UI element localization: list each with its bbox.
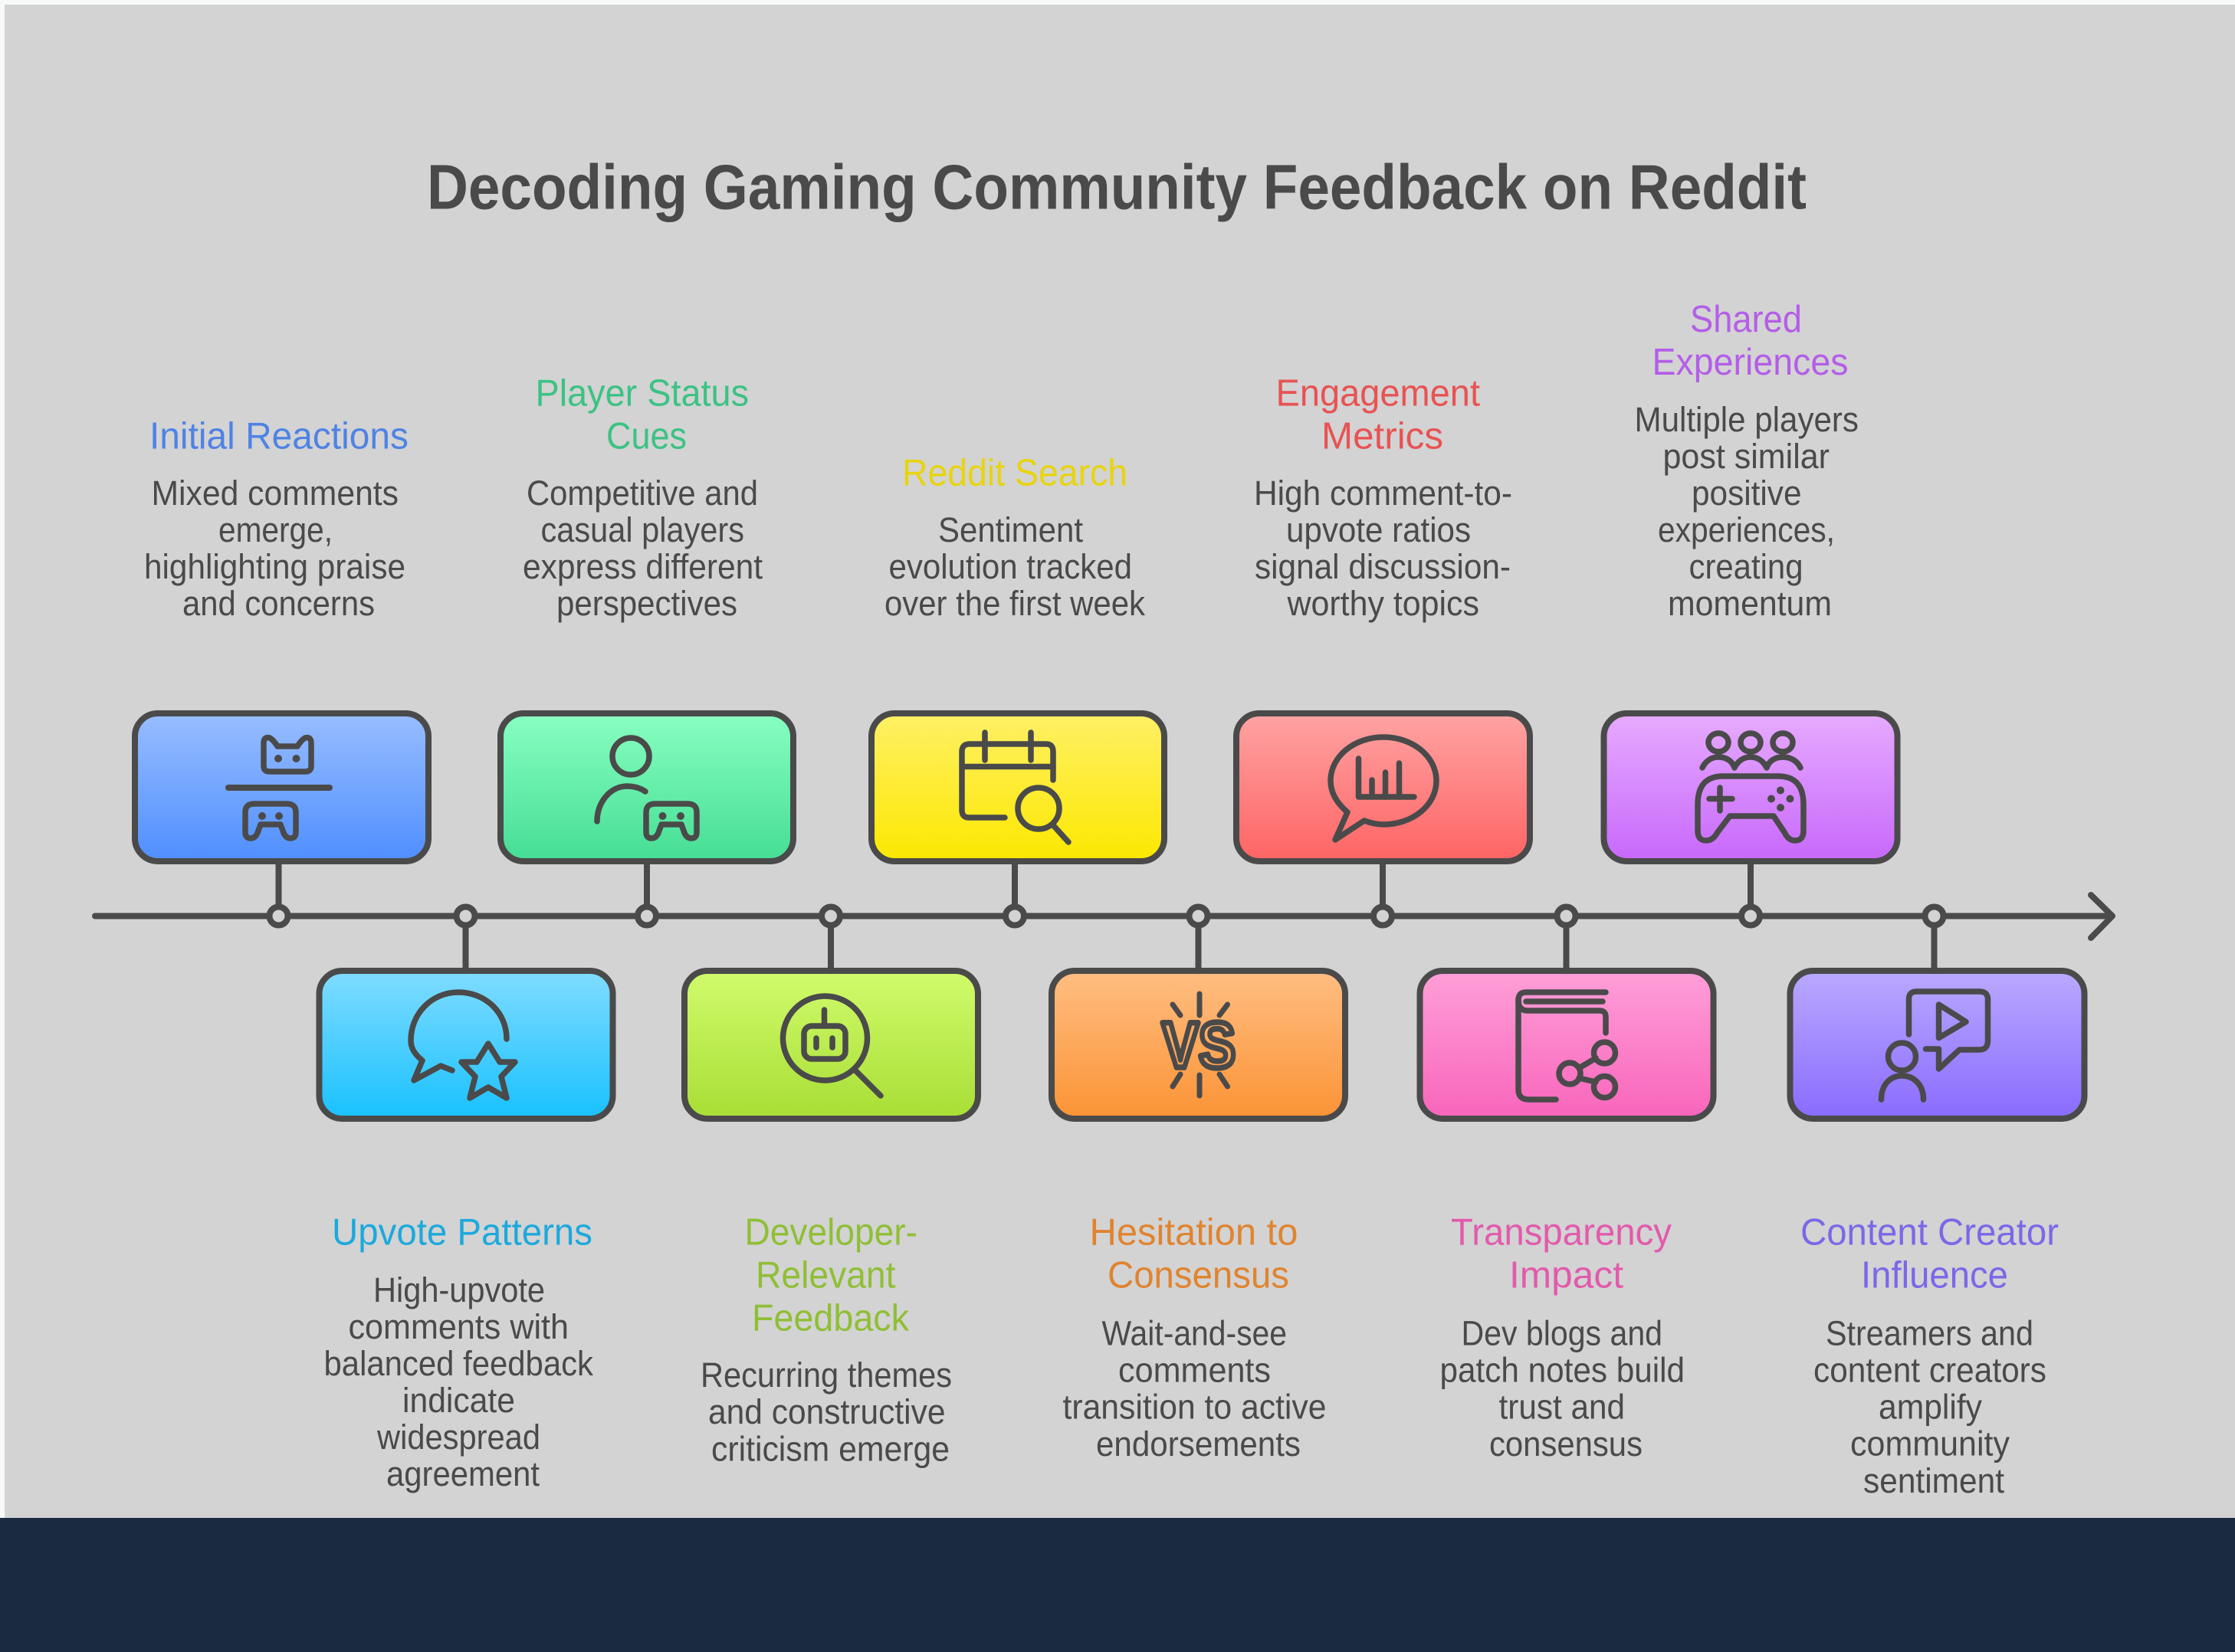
text block: hesitation to consensus: Hesitation to bbox=[1090, 1212, 1298, 1254]
text block: transparency impact: consensus bbox=[1489, 1424, 1643, 1464]
icon: book with share symbol bbox=[1518, 992, 1616, 1100]
panel: content creator card bbox=[1790, 971, 2085, 1119]
panel: initial reactions card bbox=[135, 713, 428, 861]
text block: initial reactions bbox=[144, 415, 409, 623]
text block: reddit search: evolution tracked bbox=[889, 547, 1132, 586]
text block: player status cues: perspectives bbox=[556, 584, 737, 623]
footer band bbox=[0, 1518, 2235, 1652]
text block: content creator influence: sentiment bbox=[1863, 1461, 2004, 1500]
text block: engagement metrics: Metrics bbox=[1321, 415, 1443, 457]
text block: shared experiences: Multiple players bbox=[1634, 400, 1859, 439]
text block: reddit search: Sentiment bbox=[938, 510, 1083, 549]
text block: engagement metrics bbox=[1254, 372, 1512, 623]
text block: hesitation to consensus: comments bbox=[1118, 1350, 1271, 1390]
text block: initial reactions: Initial Reactions bbox=[149, 415, 409, 457]
icon: calendar with magnifier bbox=[962, 733, 1068, 842]
text block: initial reactions: highlighting praise bbox=[144, 547, 405, 586]
text block: shared experiences: Experiences bbox=[1652, 342, 1849, 383]
panel: transparency card bbox=[1419, 971, 1714, 1119]
text block: content creator influence: community bbox=[1850, 1424, 2010, 1464]
timeline axis with arrow bbox=[95, 895, 2112, 938]
icon: creator with video bubble bbox=[1881, 992, 1988, 1100]
text block: upvote patterns: Upvote Patterns bbox=[332, 1212, 592, 1254]
panel: hesitation card bbox=[1052, 971, 1345, 1119]
text block: hesitation to consensus: endorsements bbox=[1096, 1424, 1301, 1464]
text block: developer-relevant feedback: Recurring themes bbox=[701, 1355, 952, 1395]
text block: player status cues: Player Status bbox=[535, 372, 749, 414]
icon: cat over controller bbox=[228, 738, 330, 838]
text block: content creator influence: amplify bbox=[1879, 1387, 1982, 1427]
text block: upvote patterns: indicate bbox=[402, 1381, 515, 1420]
text block: content creator influence: Streamers and bbox=[1826, 1313, 2033, 1353]
text block: initial reactions: emerge, bbox=[218, 510, 333, 549]
text block: initial reactions: Mixed comments bbox=[152, 474, 399, 513]
panel: upvote patterns card bbox=[319, 971, 613, 1119]
text block: hesitation to consensus: Wait-and-see bbox=[1102, 1313, 1287, 1353]
text block: upvote patterns: High-upvote bbox=[373, 1270, 545, 1309]
text block: transparency impact bbox=[1439, 1212, 1685, 1464]
text block: engagement metrics: upvote ratios bbox=[1286, 510, 1471, 549]
connectors and nodes bbox=[270, 864, 1944, 969]
text block: developer-relevant feedback: Feedback bbox=[752, 1298, 909, 1339]
icon: speech bubble with bar chart bbox=[1331, 737, 1436, 840]
icon: robot in magnifier bbox=[783, 996, 881, 1096]
text block: transparency impact: Transparency bbox=[1451, 1212, 1672, 1254]
text block: content creator influence: content creators bbox=[1813, 1350, 2046, 1390]
icon: player with controller bbox=[597, 738, 697, 838]
text block: engagement metrics: High comment-to- bbox=[1254, 474, 1512, 513]
text block: shared experiences: creating bbox=[1689, 547, 1803, 586]
text block: transparency impact: Impact bbox=[1509, 1255, 1623, 1296]
text block: shared experiences: experiences, bbox=[1658, 510, 1835, 549]
text block: player status cues: Cues bbox=[606, 415, 687, 457]
panel: developer feedback card bbox=[684, 971, 978, 1119]
text block: shared experiences: positive bbox=[1692, 474, 1801, 513]
text block: developer-relevant feedback: and constructive bbox=[708, 1392, 946, 1431]
title: Decoding Gaming Community Feedback on Reddit bbox=[427, 152, 1807, 222]
text block: reddit search: Reddit Search bbox=[902, 452, 1127, 493]
text block: engagement metrics: worthy topics bbox=[1287, 584, 1479, 623]
text block: transparency impact: patch notes build bbox=[1439, 1350, 1685, 1390]
text block: upvote patterns: balanced feedback bbox=[323, 1344, 593, 1383]
text block: developer-relevant feedback: Developer- bbox=[745, 1212, 917, 1254]
text block: player status cues bbox=[523, 372, 763, 623]
text block: hesitation to consensus: transition to active bbox=[1062, 1387, 1326, 1427]
text block: shared experiences: post similar bbox=[1663, 437, 1830, 476]
text block: content creator influence bbox=[1800, 1212, 2059, 1500]
icon: VS with rays: VS bbox=[1162, 1009, 1236, 1081]
text block: content creator influence: Content Creator bbox=[1800, 1212, 2059, 1254]
text block: hesitation to consensus: Consensus bbox=[1108, 1255, 1289, 1296]
text block: developer-relevant feedback bbox=[701, 1212, 952, 1468]
text block: initial reactions: and concerns bbox=[182, 584, 375, 623]
text block: shared experiences: momentum bbox=[1668, 584, 1832, 623]
text block: shared experiences bbox=[1634, 299, 1859, 623]
icon: VS with rays bbox=[1162, 994, 1236, 1096]
text block: transparency impact: trust and bbox=[1499, 1387, 1625, 1427]
panel: player status card bbox=[500, 713, 793, 861]
text block: upvote patterns: comments with bbox=[348, 1307, 569, 1346]
text block: reddit search: over the first week bbox=[884, 584, 1145, 623]
panel: engagement metrics card bbox=[1236, 713, 1530, 861]
icon: chat bubble with star bbox=[411, 992, 515, 1098]
text block: developer-relevant feedback: Relevant bbox=[756, 1255, 896, 1296]
text block: shared experiences: Shared bbox=[1690, 299, 1802, 340]
text block: player status cues: casual players bbox=[541, 510, 744, 549]
text block: player status cues: Competitive and bbox=[527, 474, 758, 513]
panel: reddit search card bbox=[871, 713, 1164, 861]
text block: upvote patterns bbox=[323, 1212, 593, 1493]
text block: reddit search bbox=[884, 452, 1145, 623]
text block: upvote patterns: agreement bbox=[386, 1454, 540, 1493]
text block: developer-relevant feedback: criticism emerge bbox=[711, 1430, 950, 1468]
text block: engagement metrics: signal discussion- bbox=[1255, 547, 1511, 586]
icon: players and game controller bbox=[1698, 733, 1803, 841]
panel: shared experiences card bbox=[1603, 713, 1898, 861]
text block: engagement metrics: Engagement bbox=[1275, 372, 1480, 414]
text block: player status cues: express different bbox=[523, 547, 763, 586]
text block: transparency impact: Dev blogs and bbox=[1461, 1313, 1662, 1353]
text block: content creator influence: Influence bbox=[1861, 1255, 2008, 1296]
text block: hesitation to consensus bbox=[1062, 1212, 1326, 1464]
text block: upvote patterns: widespread bbox=[376, 1418, 540, 1457]
